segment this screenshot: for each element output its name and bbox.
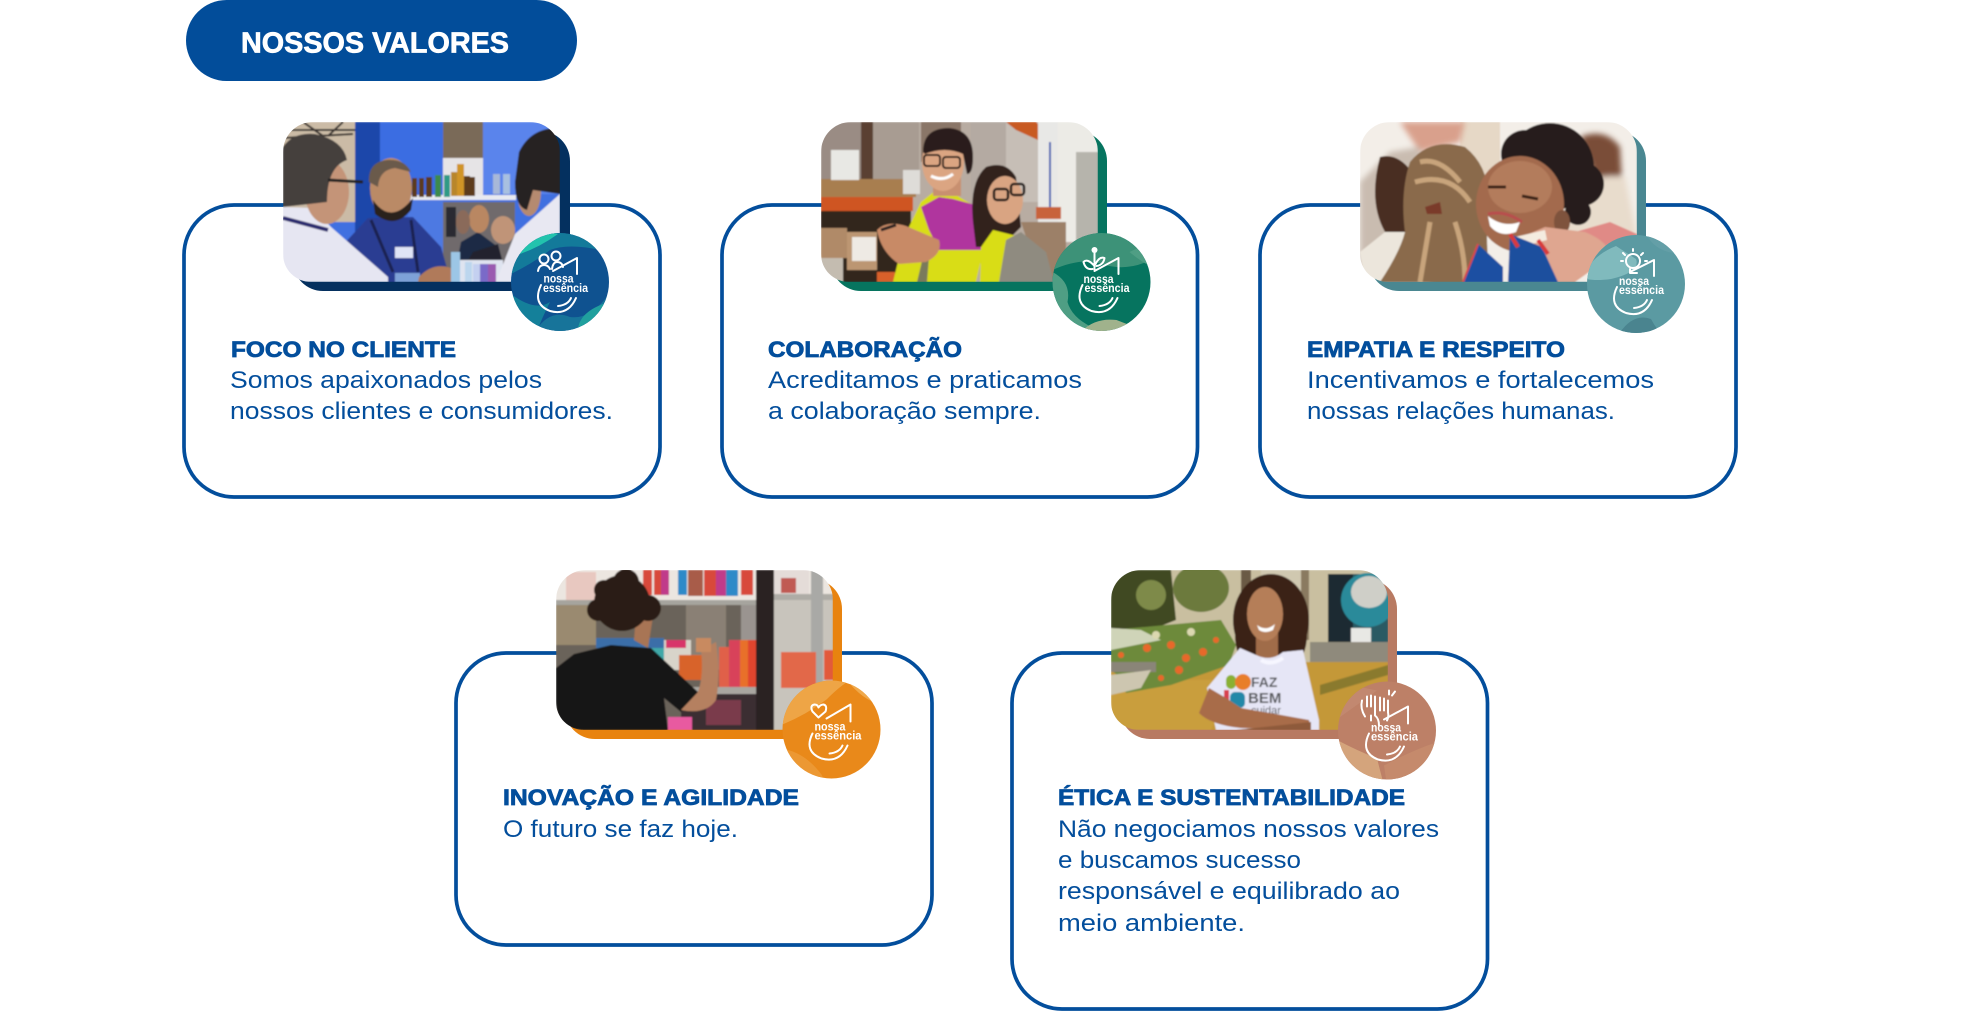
title pill: NOSSOS VALORES: NOSSOS VALORES — [241, 28, 509, 60]
logo mark: essência — [1619, 285, 1665, 297]
logo mark: nossa — [1084, 274, 1114, 286]
panel: Colaboração — [722, 122, 1198, 497]
badge: nossa essência, raised hands icon — [1338, 682, 1436, 786]
photo backing shadow — [831, 131, 1107, 291]
panel: Ética e sustentabilidade — [1012, 564, 1488, 1009]
logo mark — [1080, 247, 1130, 312]
card text — [230, 337, 613, 425]
panel: Foco no cliente — [184, 122, 660, 497]
photo: smiling woman on a garden lawn: BEM — [1248, 690, 1281, 707]
photo backing shadow — [1369, 131, 1646, 291]
badge: nossa essência, light bulb icon — [1587, 234, 1685, 339]
photo: two women hugging — [1360, 122, 1637, 282]
logo mark: nossa — [1371, 722, 1402, 734]
logo mark: essência — [543, 283, 589, 295]
card text: ÉTICA E SUSTENTABILIDADE — [1058, 785, 1405, 810]
badge: nossa essência, heart icon — [782, 680, 880, 784]
logo mark: nossa — [544, 274, 574, 286]
card text — [1307, 337, 1654, 425]
card text — [768, 337, 1082, 425]
photo backing shadow — [565, 579, 842, 739]
photo backing shadow — [1120, 579, 1397, 739]
photo: smiling woman on a garden lawn: FAZ — [1251, 674, 1278, 690]
logo mark — [538, 252, 589, 312]
logo mark: nossa — [1619, 276, 1650, 288]
logo mark: nossa — [814, 722, 846, 734]
logo mark: essência — [1084, 283, 1130, 295]
photo: smiling woman on a garden lawn: cuidar — [1251, 705, 1281, 717]
logo mark — [810, 704, 862, 760]
photo: smiling woman on a garden lawn — [1111, 564, 1395, 730]
title pill: NOSSOS VALORES — [186, 0, 577, 81]
card text — [503, 785, 799, 843]
logo mark: essência — [1371, 732, 1419, 744]
photo: young man choosing products at a shelf — [556, 569, 833, 730]
card text: Acreditamos e praticamos — [768, 367, 1082, 394]
photo: three men talking at a product stand — [283, 122, 560, 282]
card text: Não negociamos nossos valores — [1058, 816, 1439, 843]
card text: Somos apaixonados pelos — [230, 367, 542, 394]
card text: EMPATIA E RESPEITO — [1307, 337, 1565, 362]
panel: Inovação e agilidade — [456, 569, 932, 945]
card text: FOCO NO CLIENTE — [231, 337, 456, 362]
card text: O futuro se faz hoje. — [503, 816, 738, 843]
logo mark: essência — [814, 730, 862, 742]
card text: Incentivamos e fortalecemos — [1307, 367, 1654, 394]
logo mark — [1361, 690, 1419, 761]
badge: nossa essência, people icon — [511, 233, 609, 331]
card text: nossas relações humanas. — [1307, 398, 1615, 425]
badge: nossa essência, plant icon — [1052, 233, 1150, 331]
card text: e buscamos sucesso — [1058, 847, 1301, 874]
logo mark — [1614, 249, 1665, 314]
panel: Empatia e respeito — [1260, 122, 1736, 497]
photo backing shadow — [293, 131, 570, 291]
card text: a colaboração sempre. — [768, 398, 1041, 425]
card text: COLABORAÇÃO — [768, 337, 962, 362]
card text: nossos clientes e consumidores. — [230, 398, 613, 425]
card text: meio ambiente. — [1058, 910, 1245, 937]
photo: two colleagues in a warehouse — [821, 122, 1098, 282]
card text: INOVAÇÃO E AGILIDADE — [503, 785, 799, 810]
card text: responsável e equilibrado ao — [1058, 878, 1400, 905]
card text — [1058, 785, 1439, 937]
